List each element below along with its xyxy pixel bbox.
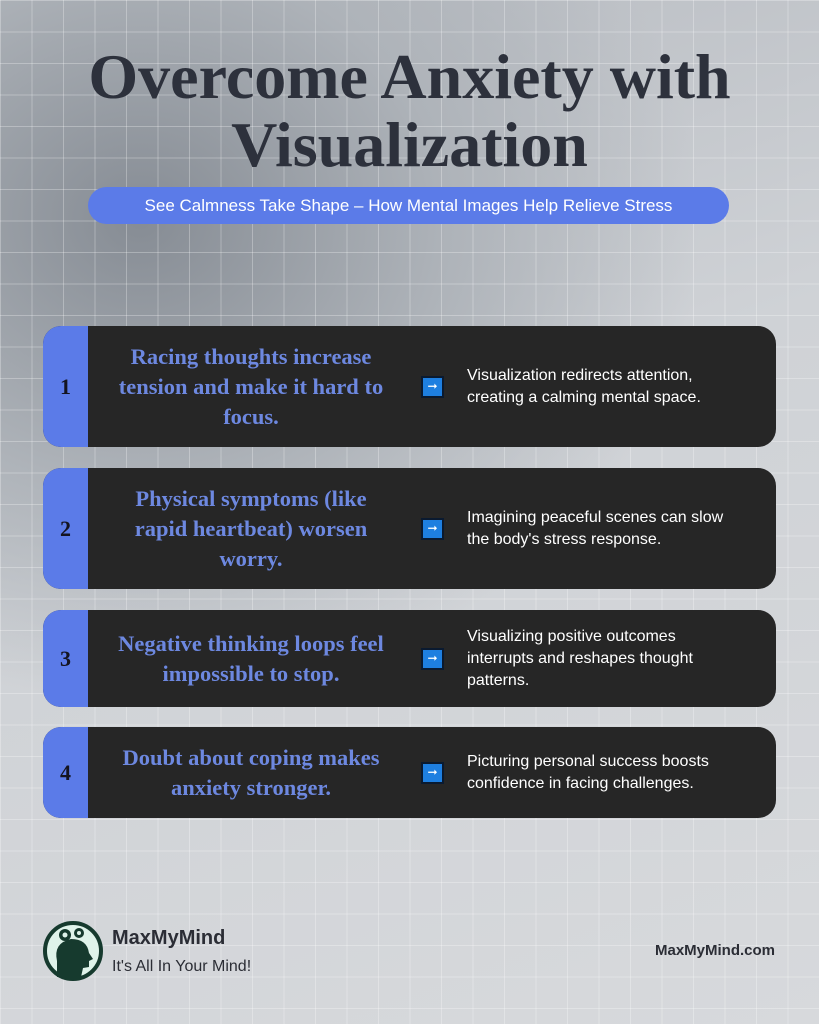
card 2: Imagining peaceful scenes can slow the body's stress response. xyxy=(467,508,723,548)
website: MaxMyMind.com xyxy=(655,942,775,959)
card 4: 4 xyxy=(60,760,71,784)
card 3: 3 xyxy=(60,646,71,670)
card 1: ➞ xyxy=(427,378,438,392)
card 2: 2 xyxy=(60,516,71,540)
card 1 xyxy=(43,326,776,447)
title: Overcome Anxiety with xyxy=(88,41,731,112)
brand name: MaxMyMind xyxy=(112,927,225,949)
logo xyxy=(43,921,103,981)
card 2: Physical symptoms (like rapid heartbeat) worsen worry. xyxy=(135,486,367,570)
card 3: Visualizing positive outcomes interrupts and reshapes thought patterns. xyxy=(467,628,693,688)
card 4 xyxy=(43,727,776,818)
card 3 xyxy=(43,610,776,707)
card 4: Doubt about coping makes anxiety stronger. xyxy=(123,744,379,800)
subtitle pill xyxy=(88,187,729,224)
card 4: Picturing personal success boosts confidence in facing challenges. xyxy=(467,752,709,792)
card 3: Negative thinking loops feel impossible to stop. xyxy=(118,630,384,686)
title xyxy=(88,41,731,180)
card 2: ➞ xyxy=(427,520,438,534)
card 1: Visualization redirects attention, creating a calming mental space. xyxy=(467,366,701,406)
card 2 xyxy=(43,468,776,589)
title: Visualization xyxy=(231,109,588,180)
card 3: ➞ xyxy=(427,650,438,664)
subtitle pill: See Calmness Take Shape – How Mental Images Help Relieve Stress xyxy=(145,196,672,215)
card 1: 1 xyxy=(60,374,71,398)
card 4: ➞ xyxy=(427,764,438,778)
tagline: It's All In Your Mind! xyxy=(112,958,251,975)
card 1: Racing thoughts increase tension and make it hard to focus. xyxy=(119,344,383,428)
